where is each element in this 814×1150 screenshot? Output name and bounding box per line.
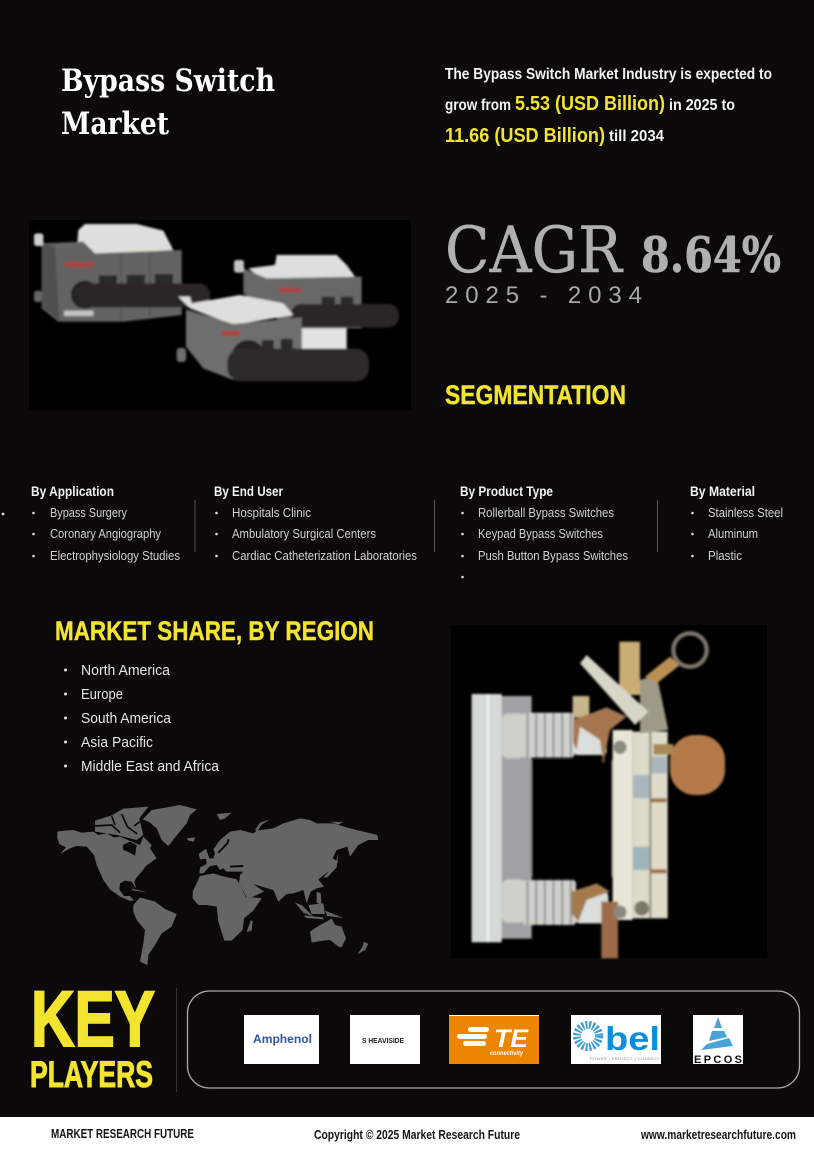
intro text: market growth forecast bbox=[445, 66, 772, 147]
panel: key player logos bbox=[188, 991, 800, 1088]
segment column: by material: Stainless Steel bbox=[708, 506, 783, 520]
region list: Middle East and Africa bbox=[81, 758, 220, 775]
baltic and black sea bbox=[218, 839, 243, 867]
segment column: by product type: By Product Type bbox=[460, 483, 553, 499]
title: Bypass Switch bbox=[61, 63, 275, 99]
japan bbox=[323, 853, 338, 877]
logo: epcos: EPCOS bbox=[694, 1054, 742, 1066]
region list: South America bbox=[81, 710, 172, 727]
logo: heaviside: S HEAVISIDE bbox=[362, 1038, 404, 1045]
segment column: by product type: Rollerball Bypass Switches bbox=[478, 506, 614, 520]
segment column: by application bbox=[31, 483, 180, 563]
image: high voltage bypass switch bbox=[451, 625, 767, 958]
segment column: by material: Aluminum bbox=[708, 527, 758, 541]
intro text: market growth forecast: grow from bbox=[445, 97, 511, 114]
segment column: by product type bbox=[460, 483, 628, 578]
region list: North America bbox=[81, 662, 171, 679]
segment column: by material: Plastic bbox=[708, 549, 742, 563]
segment column: by material: By Material bbox=[690, 483, 755, 499]
region list bbox=[64, 662, 220, 775]
novaya zemlya bbox=[255, 819, 270, 831]
north america bbox=[57, 830, 157, 901]
heading: segmentation: SEGMENTATION bbox=[445, 380, 626, 410]
heading: key players: PLAYERS bbox=[30, 1054, 153, 1095]
logo: amphenol: Amphenol bbox=[253, 1034, 312, 1046]
image: three bypass switch units bbox=[29, 220, 411, 410]
logo: bel bbox=[571, 1015, 661, 1064]
logo: heaviside bbox=[350, 1015, 420, 1064]
CAGR figure: CAGR bbox=[445, 214, 624, 288]
siberian islands bbox=[331, 822, 343, 825]
new zealand bbox=[357, 942, 368, 954]
CAGR figure: 2025 - 2034 bbox=[445, 282, 642, 309]
australia bbox=[310, 918, 346, 947]
intro text: market growth forecast: in 2025 to bbox=[669, 97, 735, 114]
intro text: market growth forecast: till 2034 bbox=[609, 128, 664, 145]
region list: Asia Pacific bbox=[81, 734, 153, 751]
logo: bel: bel bbox=[605, 1020, 660, 1057]
logo: te connectivity bbox=[449, 1015, 539, 1064]
segment column: by product type: Push Button Bypass Switches bbox=[478, 549, 628, 563]
heading: key players: KEY bbox=[31, 974, 155, 1063]
footer bar bbox=[0, 1117, 814, 1150]
title bbox=[61, 63, 275, 142]
segment column: by end user: Hospitals Clinic bbox=[232, 506, 311, 520]
intro text: market growth forecast: 5.53 (USD Billion) bbox=[515, 93, 665, 115]
segment column: by end user bbox=[214, 483, 417, 563]
logo: epcos bbox=[693, 1015, 743, 1066]
segment column: by application: Coronary Angiography bbox=[50, 527, 162, 541]
southeast asia islands bbox=[295, 892, 343, 919]
madagascar bbox=[247, 921, 253, 932]
iceland bbox=[187, 837, 195, 842]
greenland bbox=[143, 805, 197, 846]
south america bbox=[133, 897, 177, 965]
region list: Europe bbox=[81, 686, 123, 703]
arctic islands bbox=[95, 807, 148, 840]
stray bullet bbox=[2, 513, 4, 515]
segment column: by end user: Ambulatory Surgical Centers bbox=[232, 527, 376, 541]
CAGR figure bbox=[445, 214, 781, 309]
intro text: market growth forecast: 11.66 (USD Billion) bbox=[445, 125, 605, 147]
unit 3 bbox=[177, 295, 369, 381]
segment column: by application: Electrophysiology Studies bbox=[50, 549, 180, 563]
footer bar: MARKET RESEARCH FUTURE bbox=[51, 1127, 194, 1141]
cuba and caribbean bbox=[132, 889, 147, 892]
eurasia bbox=[199, 818, 378, 903]
heading: market share by region: MARKET SHARE, BY REGION bbox=[55, 616, 374, 646]
heading: key players bbox=[30, 974, 155, 1095]
segment column: by end user: Cardiac Catheterization Laboratories bbox=[232, 549, 417, 563]
logo: amphenol bbox=[244, 1015, 319, 1064]
british isles bbox=[199, 849, 209, 859]
world map bbox=[57, 805, 378, 965]
unit 1 bbox=[34, 224, 210, 322]
segment column: by product type: Keypad Bypass Switches bbox=[478, 527, 603, 541]
logo: te connectivity: connectivity bbox=[490, 1051, 524, 1057]
CAGR figure: 8.64% bbox=[641, 226, 781, 284]
segment column: by material bbox=[690, 483, 783, 563]
unit 2 bbox=[234, 255, 399, 350]
segment column: by end user: By End User bbox=[214, 483, 283, 499]
footer bar: Copyright © 2025 Market Research Future bbox=[314, 1128, 520, 1142]
title: Market bbox=[61, 106, 170, 142]
hudson bay bbox=[123, 842, 137, 856]
segment column: by application: Bypass Surgery bbox=[50, 506, 128, 520]
logo: te connectivity: TE bbox=[494, 1025, 529, 1053]
africa bbox=[193, 873, 262, 941]
segment column: by application: By Application bbox=[31, 483, 114, 499]
arctic channels bbox=[93, 814, 140, 834]
logo: bel: POWER | PROTECT | CONNECT bbox=[590, 1056, 661, 1061]
svalbard bbox=[217, 813, 232, 820]
